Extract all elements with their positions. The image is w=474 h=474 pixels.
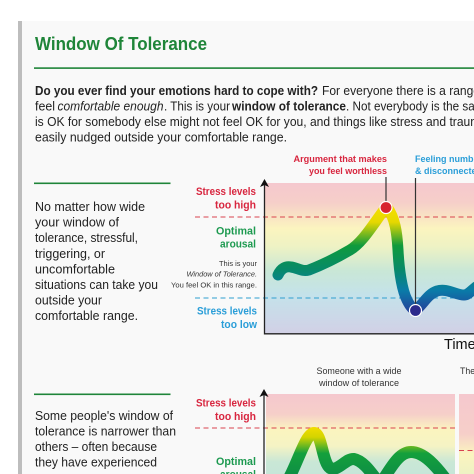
chart background bands bbox=[265, 183, 474, 334]
bottom chart bbox=[195, 366, 474, 474]
marker: stress peak bbox=[380, 202, 392, 214]
top chart bbox=[171, 154, 474, 353]
left rule 1 bbox=[34, 182, 170, 184]
label: stress too low bbox=[197, 306, 257, 331]
callout: argument: Argument that makes bbox=[294, 154, 387, 164]
title rule bbox=[34, 67, 474, 69]
intro paragraph: comfortable enough bbox=[58, 98, 164, 114]
title: Window Of Tolerance bbox=[35, 34, 207, 54]
leader line to red point bbox=[385, 177, 387, 207]
intro paragraph: easily nudged outside your comfortable range. bbox=[35, 130, 287, 144]
callout: feeling numb bbox=[415, 154, 474, 176]
label: stress too high: too high bbox=[215, 411, 256, 423]
label: optimal arousal bbox=[216, 225, 256, 250]
caption: wide window: Someone with a wide bbox=[316, 366, 402, 376]
y axis bbox=[264, 183, 474, 334]
callout: feeling numb: Feeling numb bbox=[415, 154, 474, 164]
left text block 1: uncomfortable bbox=[35, 261, 115, 276]
left rule 2 bbox=[34, 394, 170, 395]
label: window of tolerance note bbox=[171, 259, 257, 289]
left text block 1: triggering, or bbox=[35, 246, 106, 261]
label: stress too high bbox=[196, 398, 256, 423]
narrow window threshold line bbox=[459, 450, 474, 452]
left text block 1: No matter how wide bbox=[35, 199, 145, 214]
left text block 1: comfortable range. bbox=[35, 308, 138, 323]
left text block 1 bbox=[35, 199, 158, 323]
label: stress too low: too low bbox=[221, 319, 257, 331]
narrow window panel background bbox=[459, 394, 474, 474]
wide window panel background bbox=[266, 394, 455, 474]
label: optimal arousal: arousal bbox=[220, 238, 256, 250]
lower threshold dashed line bbox=[195, 297, 474, 299]
y axis arrowhead bbox=[260, 389, 268, 397]
wide window curve bbox=[288, 433, 448, 474]
intro paragraph: feel bbox=[35, 98, 55, 114]
left text block 2: Some people's window of bbox=[35, 408, 173, 423]
marker: numb low point bbox=[410, 304, 422, 316]
intro paragraph: Do you ever find your emotions hard to cope with? bbox=[35, 83, 318, 98]
callout: argument bbox=[294, 154, 387, 176]
y axis arrowhead bbox=[260, 179, 269, 187]
label: optimal arousal: Optimal bbox=[216, 225, 256, 237]
intro paragraph: window of tolerance bbox=[231, 98, 346, 114]
left text block 1: situations can take you bbox=[35, 277, 158, 292]
leader line to blue point bbox=[414, 178, 416, 310]
caption: wide window bbox=[316, 366, 402, 388]
upper threshold dashed line bbox=[195, 216, 474, 218]
label: window of tolerance note: Window of Tolerance. bbox=[186, 270, 257, 279]
wide window threshold line bbox=[195, 427, 455, 429]
stress curve bbox=[278, 207, 474, 310]
label: optimal arousal: Optimal bbox=[216, 456, 256, 468]
left text block 2: they have experienced bbox=[35, 454, 157, 470]
label: stress too high bbox=[196, 186, 256, 211]
left text block 2 bbox=[35, 408, 176, 470]
label: stress too low: Stress levels bbox=[197, 306, 257, 318]
left text block 1: your window of bbox=[35, 215, 119, 230]
label: stress too high: Stress levels bbox=[196, 398, 256, 410]
intro paragraph: . This is your bbox=[164, 98, 231, 114]
left text block 2: tolerance is narrower than bbox=[35, 424, 176, 438]
label: stress too high: too high bbox=[215, 199, 256, 211]
label: optimal arousal bbox=[216, 456, 256, 474]
paper shadow bbox=[18, 21, 22, 474]
left text block 1: outside your bbox=[35, 293, 103, 308]
left text block 1: tolerance, stressful, bbox=[35, 230, 138, 245]
label: stress too high: Stress levels bbox=[196, 186, 256, 198]
label: window of tolerance note: You feel OK in this range. bbox=[171, 280, 257, 289]
caption: wide window: window of tolerance bbox=[318, 378, 399, 388]
callout: argument: you feel worthless bbox=[309, 166, 387, 176]
left text block 2: others – often because bbox=[35, 439, 157, 454]
intro paragraph bbox=[35, 83, 474, 144]
y axis bbox=[263, 393, 265, 474]
label: window of tolerance note: This is your bbox=[219, 259, 257, 268]
